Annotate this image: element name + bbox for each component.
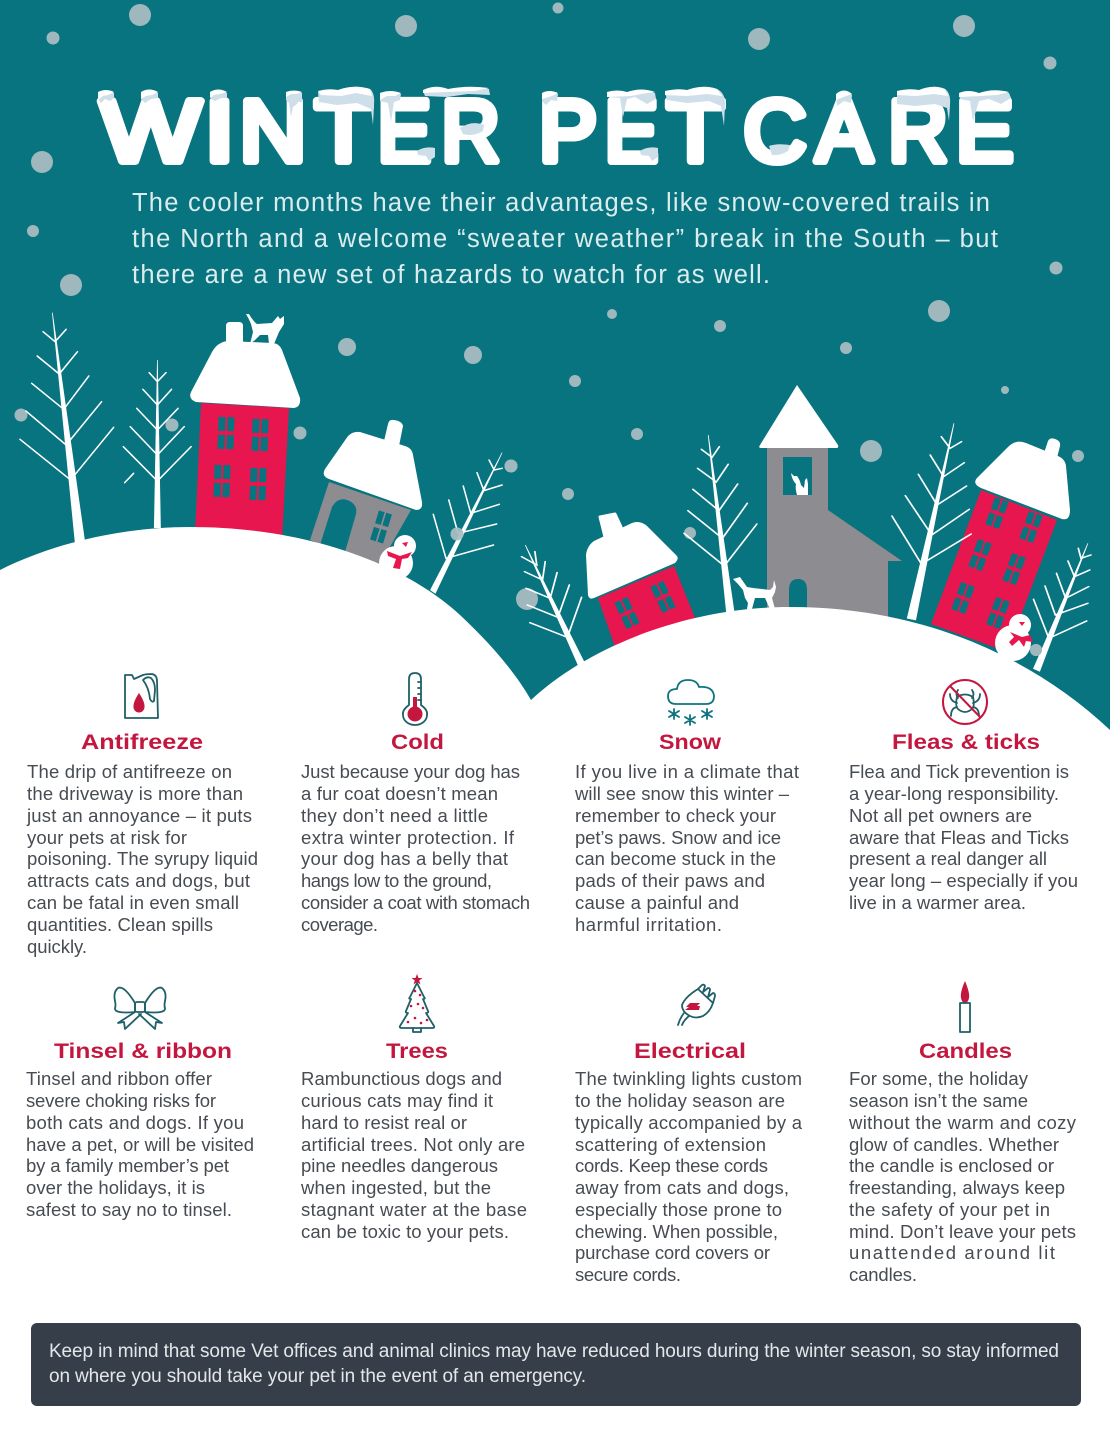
body text: they don’t need a little	[301, 805, 488, 826]
right village scene	[521, 385, 1091, 671]
body text: can become stuck in the	[575, 848, 776, 869]
heading: Trees	[386, 1040, 448, 1063]
body text: artificial trees. Not only are	[301, 1134, 525, 1155]
title: Winter Pet Care: C	[744, 83, 806, 180]
body text: away from cats and dogs,	[575, 1177, 789, 1198]
heading: Candles	[919, 1040, 1012, 1063]
body text	[301, 761, 530, 935]
body text: a year-long responsibility.	[849, 783, 1059, 804]
body text: over the holidays, it is	[26, 1177, 205, 1198]
body text: have a pet, or will be visited	[26, 1134, 254, 1155]
red leaning tower house	[931, 438, 1070, 652]
title: Winter Pet Care: I	[205, 83, 234, 180]
red small house	[586, 514, 695, 650]
body text: coverage.	[301, 914, 378, 935]
body text: harmful irritation.	[575, 914, 722, 935]
body text: stagnant water at the base	[301, 1199, 527, 1220]
snow dot on right hill edge	[1030, 644, 1042, 656]
body text: live in a warmer area.	[849, 892, 1026, 913]
panel: Cold	[301, 673, 530, 935]
body text: just an annoyance – it puts	[26, 805, 252, 826]
body text: a fur coat doesn’t mean	[301, 783, 498, 804]
footer callout: on where you should take your pet in the event of an emergency.	[49, 1366, 586, 1387]
cat in tower window	[791, 473, 808, 495]
icon: no fleas	[943, 680, 987, 724]
body text: Tinsel and ribbon offer	[26, 1068, 212, 1089]
body text	[300, 1068, 527, 1242]
tree: right of church	[905, 423, 969, 620]
heading: Snow	[659, 731, 722, 754]
intro text: there are a new set of hazards to watch for as well.	[132, 261, 770, 289]
panel: Fleas and ticks	[849, 680, 1078, 913]
tree: centre	[684, 435, 757, 613]
body text: pads of their paws and	[575, 870, 765, 891]
cat on the roof	[246, 314, 284, 344]
grey cottage	[310, 420, 422, 566]
panel: Antifreeze	[26, 674, 258, 957]
body text: Not all pet owners are	[849, 805, 1032, 826]
snow caps on title letters	[98, 87, 1011, 161]
body text: without the warm and cozy	[848, 1112, 1077, 1133]
body text: extra winter protection. If	[301, 827, 515, 848]
snow dots over trees	[450, 460, 518, 540]
icon: snow cloud	[668, 680, 714, 725]
body text: poisoning. The syrupy liquid	[27, 848, 258, 869]
body text	[849, 761, 1078, 913]
body text: purchase cord covers or	[575, 1242, 770, 1263]
body text: will see snow this winter –	[574, 783, 790, 804]
body text: your pets at risk for	[27, 827, 187, 848]
body text: aware that Fleas and Ticks	[849, 827, 1069, 848]
body text	[575, 1068, 803, 1285]
title: Winter Pet Care: W	[101, 83, 200, 180]
body text: secure cords.	[575, 1264, 681, 1285]
icon: christmas tree	[400, 974, 434, 1032]
body text: when ingested, but the	[300, 1177, 491, 1198]
body text: glow of candles. Whether	[849, 1134, 1059, 1155]
body text: typically accompanied by a	[575, 1112, 803, 1133]
body text: can be toxic to your pets.	[301, 1221, 509, 1242]
body text: consider a coat with stomach	[301, 892, 530, 913]
body text: quickly.	[27, 936, 87, 957]
body text: mind. Don’t leave your pets	[849, 1221, 1076, 1242]
icon: plug	[678, 985, 715, 1025]
tree branch over house	[892, 516, 971, 564]
body text: The twinkling lights custom	[575, 1068, 802, 1089]
title: Winter Pet Care: P	[539, 83, 597, 180]
title: Winter Pet Care: N	[240, 83, 306, 180]
heading: Tinsel & ribbon	[54, 1040, 232, 1063]
body text: curious cats may find it	[301, 1090, 493, 1111]
body text	[574, 761, 799, 935]
body text: season isn’t the same	[849, 1090, 1028, 1111]
body text: both cats and dogs. If you	[26, 1112, 244, 1133]
body text: freestanding, always keep	[849, 1177, 1065, 1198]
title: Winter Pet Care: R	[442, 83, 500, 180]
body text: the safety of your pet in	[849, 1199, 1050, 1220]
body text: year long – especially if you	[849, 870, 1078, 891]
body text: pine needles dangerous	[301, 1155, 498, 1176]
body text: quantities. Clean spills	[27, 914, 213, 935]
body text: attracts cats and dogs, but	[27, 870, 250, 891]
body text: The drip of antifreeze on	[27, 761, 232, 782]
dog	[733, 577, 776, 609]
body text: If you live in a climate that	[575, 761, 799, 782]
body text: pet’s paws. Snow and ice	[575, 827, 781, 848]
left village scene	[20, 313, 518, 593]
body text	[26, 761, 258, 957]
heading: Antifreeze	[81, 731, 203, 754]
body text: the driveway is more than	[27, 783, 243, 804]
panel: Snow	[574, 680, 799, 935]
falling snow dots	[14, 2, 1084, 656]
body text: scattering of extension	[575, 1134, 766, 1155]
snowman left	[379, 535, 416, 580]
body text: Rambunctious dogs and	[301, 1068, 502, 1089]
tree: far left	[20, 313, 114, 542]
tree: small left	[521, 545, 585, 667]
body text: present a real danger all	[849, 848, 1047, 869]
panel: Candles	[848, 981, 1077, 1285]
body text: Just because your dog has	[301, 761, 520, 782]
body text: remember to check your	[575, 805, 776, 826]
intro text: the North and a welcome “sweater weather” break in the South – but	[132, 225, 998, 253]
title: Winter Pet Care: A	[816, 83, 872, 180]
body text: by a family member’s pet	[26, 1155, 229, 1176]
church with tower	[759, 385, 902, 640]
body text: cause a painful and	[575, 892, 739, 913]
body text: For some, the holiday	[849, 1068, 1029, 1089]
tree: right of cottage	[431, 453, 502, 593]
heading: Electrical	[634, 1040, 746, 1063]
body text: safest to say no to tinsel.	[26, 1199, 232, 1220]
title: Winter Pet Care: T	[315, 83, 372, 180]
title: Winter Pet Care: T	[667, 83, 724, 180]
title: Winter Pet Care	[98, 83, 1013, 180]
icon: antifreeze jug	[125, 674, 158, 718]
intro text	[132, 189, 998, 289]
body text: hangs low to the ground,	[301, 870, 492, 891]
icon: thermometer	[403, 673, 427, 725]
snowman right	[995, 614, 1033, 661]
title: Winter Pet Care: R	[888, 83, 948, 180]
panel: Tinsel and ribbon	[26, 988, 254, 1220]
tree: second left	[123, 360, 191, 528]
body text: severe choking risks for	[26, 1090, 216, 1111]
footer callout: Keep in mind that some Vet offices and animal clinics may have reduced hours during the winter season, so stay informed	[49, 1341, 1059, 1362]
body text: unattended around lit	[849, 1242, 1055, 1263]
teal night sky background	[0, 0, 1110, 740]
title: Winter Pet Care: E	[605, 83, 658, 180]
intro text: The cooler months have their advantages, like snow-covered trails in	[132, 189, 990, 217]
red tall house	[190, 322, 300, 540]
body text	[26, 1068, 254, 1220]
panel: Trees	[300, 974, 527, 1242]
body text: to the holiday season are	[575, 1090, 785, 1111]
body text: especially those prone to	[575, 1199, 782, 1220]
tree: far right	[1034, 543, 1091, 671]
body text: candles.	[849, 1264, 917, 1285]
body text: Flea and Tick prevention is	[849, 761, 1069, 782]
body text: can be fatal in even small	[27, 892, 239, 913]
body text	[848, 1068, 1077, 1285]
footer callout	[31, 1323, 1081, 1406]
body text: the candle is enclosed or	[849, 1155, 1054, 1176]
body text: cords. Keep these cords	[575, 1155, 768, 1176]
snow hills	[0, 527, 1110, 1436]
heading: Fleas & ticks	[892, 731, 1040, 754]
body text: hard to resist real or	[301, 1112, 467, 1133]
body text: your dog has a belly that	[301, 848, 508, 869]
title: Winter Pet Care: E	[956, 83, 1013, 180]
panel: Electrical	[575, 985, 803, 1285]
icon: bow	[114, 988, 166, 1029]
heading: Cold	[391, 731, 444, 754]
title: Winter Pet Care: E	[378, 83, 431, 180]
body text: chewing. When possible,	[575, 1221, 778, 1242]
icon: candle	[960, 981, 970, 1032]
